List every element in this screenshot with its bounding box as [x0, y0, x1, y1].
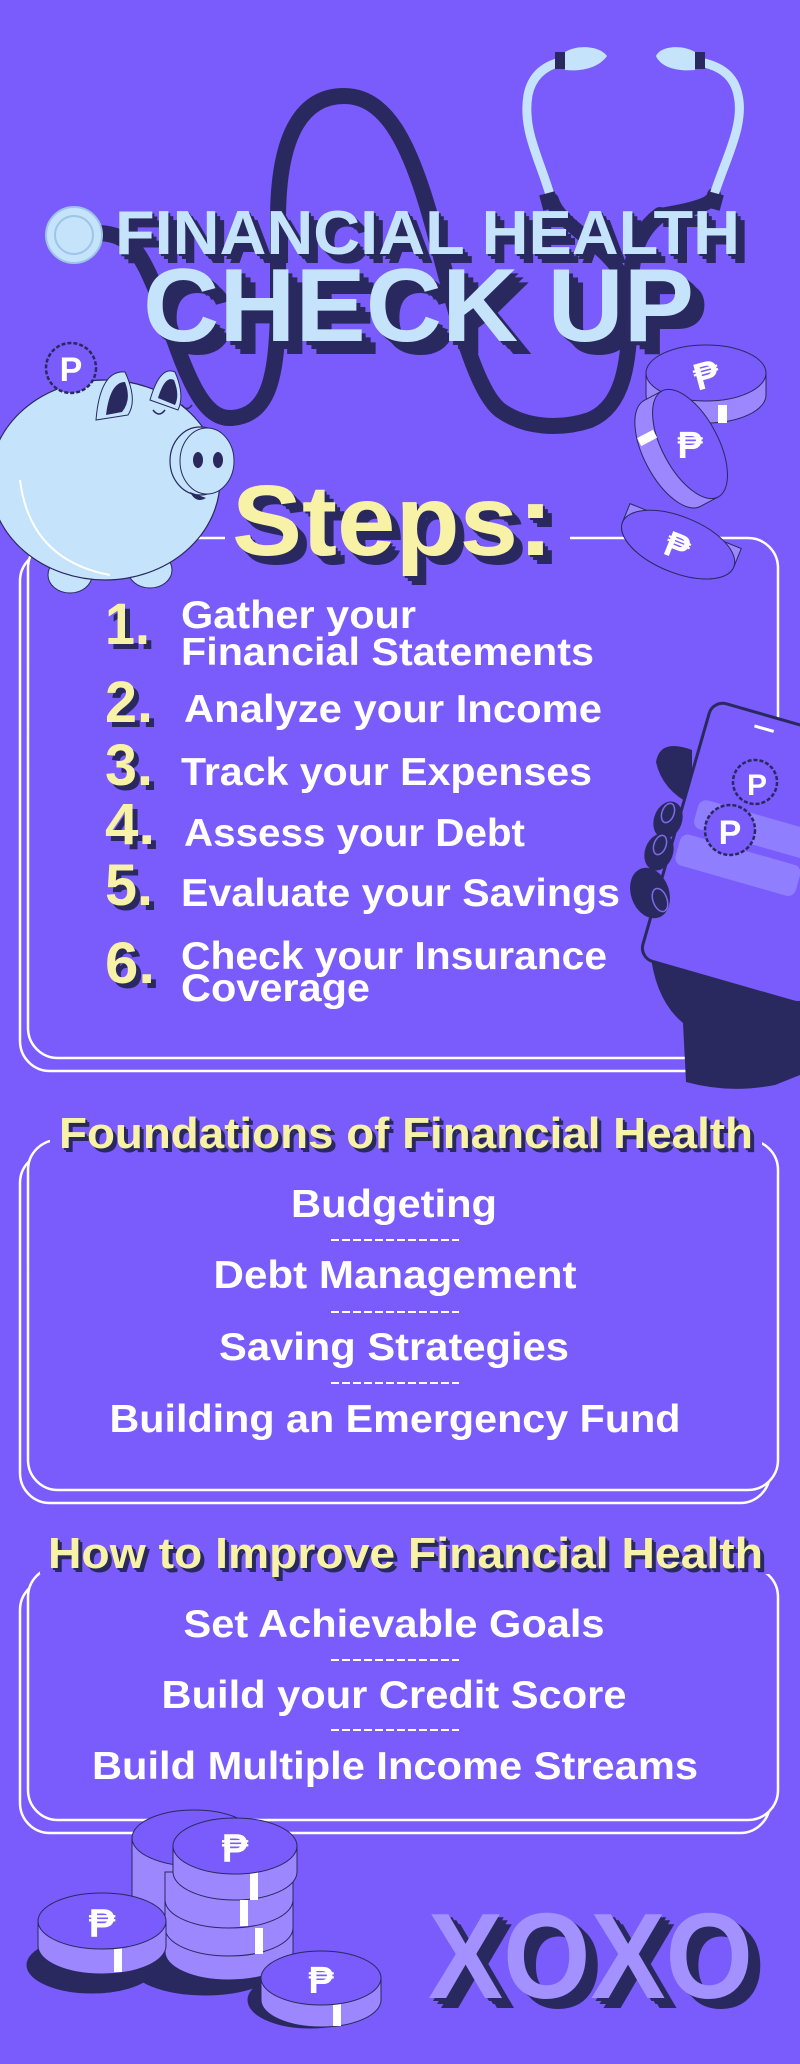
xoxo: XOXO [428, 1888, 753, 2024]
step 6: Coverage [181, 967, 370, 1010]
phone in hand [623, 700, 800, 1089]
heading: how to improve: How to Improve Financial Health [48, 1529, 763, 1578]
step 5 [105, 853, 620, 923]
title: CHECK UP [152, 256, 703, 372]
improve list: Set Achievable Goals [184, 1603, 604, 1646]
xoxo: XOXO [436, 1894, 761, 2030]
step 2: 2. [105, 670, 153, 735]
heading: Steps: Steps: [234, 467, 555, 579]
title: FINANCIAL HEALTH [124, 208, 749, 277]
front stack [165, 1872, 293, 1980]
heading: foundations: Foundations of Financial Health [61, 1111, 755, 1160]
coins: falling: ₱ [689, 352, 725, 399]
eyes [153, 405, 192, 414]
xoxo: XOXO [440, 1898, 765, 2034]
earpieces [565, 47, 607, 70]
panel: how to improve [20, 1529, 778, 1833]
coin pile: ₱ [308, 1960, 334, 2002]
improve list: Build Multiple Income Streams [92, 1745, 698, 1788]
coin on pig [46, 343, 96, 393]
step 3 [105, 733, 592, 803]
foundations list: Building an Emergency Fund [110, 1398, 680, 1441]
title [115, 199, 749, 377]
step 4 [105, 792, 525, 862]
coins: falling: ₱ [659, 523, 697, 570]
heading: Steps: Steps: [232, 465, 553, 577]
steps list [105, 592, 620, 1010]
phone in hand: P [747, 769, 767, 802]
heading: how to improve: How to Improve Financial Health [50, 1531, 765, 1580]
right coin [261, 1978, 381, 2027]
heading: foundations: Foundations of Financial Health [63, 1113, 757, 1162]
step 1: Financial Statements [181, 631, 594, 674]
coins: falling [612, 345, 766, 593]
step 1: 1. [105, 592, 150, 657]
step 2: 2. [110, 675, 158, 740]
screen coins [733, 760, 777, 804]
coins: falling: ₱ [677, 425, 703, 467]
heading: how to improve: How to Improve Financial Health [52, 1533, 767, 1582]
panel: foundations [20, 1109, 778, 1503]
phone [639, 700, 800, 1006]
foundations list: Debt Management [214, 1254, 577, 1297]
back stack [132, 1838, 256, 1956]
coin pile [27, 1810, 381, 2028]
step 5: 5. [105, 853, 153, 918]
stethoscope tube [100, 96, 660, 426]
step 3: 3. [110, 738, 158, 803]
step 1: 1. [110, 597, 155, 662]
coin pile: ₱ [222, 1827, 249, 1871]
step 1 [105, 592, 594, 674]
title: FINANCIAL HEALTH [117, 201, 742, 270]
title: FINANCIAL HEALTH [120, 204, 745, 273]
heading: foundations: Foundations of Financial Health [59, 1109, 753, 1158]
step 4: 4. [110, 797, 160, 862]
step 2 [105, 670, 602, 740]
piggy bank [0, 343, 234, 593]
foundations list: Saving Strategies [219, 1326, 569, 1369]
phone in hand: P [719, 814, 741, 852]
step 6 [105, 931, 607, 1010]
title: CHECK UP [143, 248, 694, 364]
foundations list: Budgeting [291, 1183, 497, 1226]
heading: Steps: Steps: [237, 470, 558, 582]
ears [96, 372, 132, 420]
snout [170, 427, 230, 495]
chest piece [46, 207, 102, 263]
step 6: 6. [105, 931, 155, 996]
left coin [38, 1921, 166, 1974]
title: CHECK UP [157, 261, 708, 377]
foundations list [110, 1183, 680, 1441]
thumb [656, 746, 692, 805]
title: CHECK UP [147, 252, 698, 368]
panel: steps box [20, 525, 778, 1071]
coin pile: ₱ [89, 1902, 116, 1946]
title: FINANCIAL HEALTH [115, 199, 740, 268]
hand palm [650, 860, 800, 1089]
xoxo: XOXO [432, 1891, 757, 2027]
step 3: 3. [105, 733, 153, 798]
step 5: Evaluate your Savings [181, 872, 620, 915]
piggy bank: P [60, 351, 82, 389]
improve list [92, 1603, 698, 1788]
stethoscope [46, 47, 739, 426]
improve list: Build your Credit Score [162, 1674, 626, 1717]
fingers [648, 797, 688, 843]
step 6: Check your Insurance [181, 935, 607, 978]
heading: Steps: Steps: [241, 474, 562, 586]
step 2: Analyze your Income [184, 688, 602, 731]
ear tubes [527, 62, 739, 195]
step 1: Gather your [181, 594, 416, 637]
step 5: 5. [110, 858, 158, 923]
step 4: Assess your Debt [184, 812, 525, 855]
step 3: Track your Expenses [181, 751, 592, 794]
step 6: 6. [110, 936, 160, 1001]
step 4: 4. [105, 792, 155, 857]
